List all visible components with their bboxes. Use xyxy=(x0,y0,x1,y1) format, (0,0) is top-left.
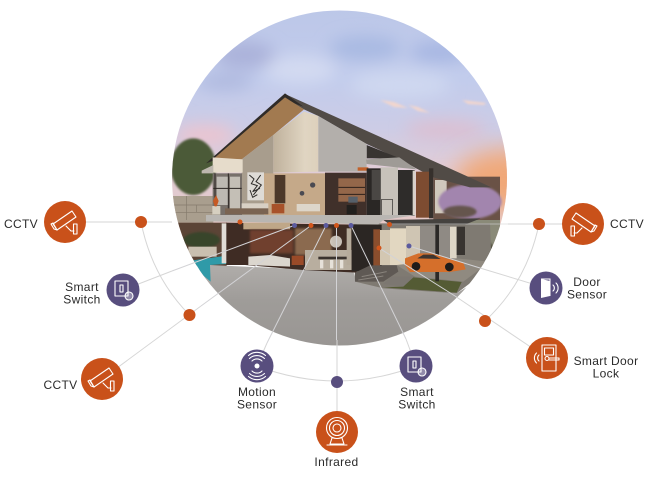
label: CCTV top left: CCTV xyxy=(4,217,38,231)
label: Smart Door Lock: Smart Door xyxy=(574,354,638,368)
device: Smart Switch bottom xyxy=(400,350,432,382)
orange sports car xyxy=(405,253,466,272)
label: Motion Sensor: Sensor xyxy=(237,398,277,412)
label: Door Sensor: Door xyxy=(573,275,601,289)
device: Door Sensor xyxy=(530,272,562,304)
ground xyxy=(199,265,466,346)
pool xyxy=(194,256,226,282)
trees and wall left xyxy=(170,138,227,266)
floor slab xyxy=(206,215,417,224)
device: Infrared camera xyxy=(316,411,358,453)
device: Smart Door Lock xyxy=(526,337,568,379)
device: Smart Switch left xyxy=(106,274,140,306)
house sensor dots xyxy=(238,220,412,250)
right unit background and flowering tree xyxy=(433,177,502,260)
label: Motion Sensor: Motion xyxy=(238,385,276,399)
lower right interior and walls xyxy=(352,225,465,271)
device: Motion Sensor xyxy=(240,350,274,382)
right upper facade xyxy=(366,157,433,218)
roof xyxy=(206,93,492,187)
label: Door Sensor: Sensor xyxy=(567,288,607,302)
lower floor interior xyxy=(222,223,357,273)
photo: house cutaway in circle xyxy=(172,10,507,346)
backing behind entry and carport xyxy=(353,223,492,293)
label: Smart Switch bottom: Switch xyxy=(398,398,436,412)
label: Smart Switch left: Switch xyxy=(63,292,101,306)
label: Smart Switch left: Smart xyxy=(65,280,99,294)
study room xyxy=(325,167,368,215)
label: Smart Switch bottom: Smart xyxy=(400,385,434,399)
upper walls xyxy=(202,112,367,215)
wall art xyxy=(247,172,264,200)
device: CCTV lower left xyxy=(81,358,123,400)
carport roof and post xyxy=(383,218,481,281)
connector lines xyxy=(65,222,583,432)
label: CCTV right: CCTV xyxy=(610,217,644,231)
label: Infrared: Infrared xyxy=(314,455,359,469)
upper left window xyxy=(213,173,242,215)
sky with clouds xyxy=(172,10,507,248)
device: CCTV top left xyxy=(44,201,86,243)
entry stairs xyxy=(355,265,398,282)
device: CCTV right xyxy=(562,203,604,245)
living room upper xyxy=(212,173,325,215)
driveway and lawn xyxy=(383,258,490,293)
label: CCTV lower left: CCTV xyxy=(43,378,78,392)
junction dots on arcs xyxy=(135,216,545,388)
house illustration xyxy=(170,93,502,353)
label: Smart Door Lock: Lock xyxy=(593,366,620,380)
